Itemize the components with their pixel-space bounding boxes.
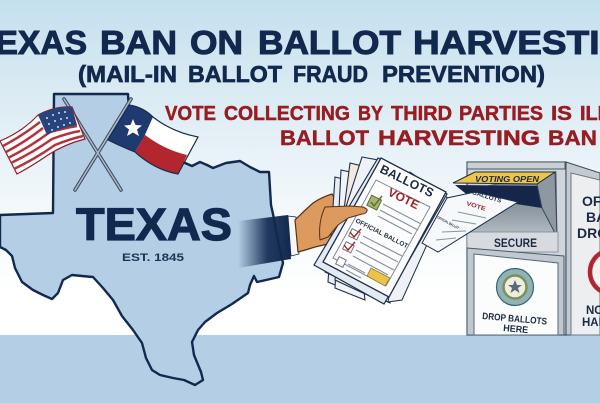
- yellow voting open label: [453, 172, 555, 184]
- red warning line 1: COLLECTING: [224, 103, 350, 125]
- red warning line 1: VOTE: [165, 103, 216, 125]
- red warning line 2: [280, 126, 597, 150]
- here text: HERE: [503, 323, 529, 336]
- Texas seal: [496, 268, 534, 306]
- secure label: SECURE: [494, 238, 537, 250]
- established date: EST. 1845: [122, 252, 184, 264]
- secure strip: [467, 232, 558, 252]
- vote label: VOTE: [386, 185, 421, 212]
- red warning line 1: [165, 103, 600, 125]
- front ballot: [323, 158, 446, 297]
- subtitle: (MAIL-IN: [78, 61, 177, 87]
- yellow stamp: [367, 268, 390, 286]
- box top band: [467, 162, 565, 169]
- lone star: [124, 119, 142, 136]
- flag poles: [64, 99, 131, 190]
- thumb over ballots: [320, 206, 367, 240]
- shirt cuff: [288, 216, 299, 256]
- crossed flags: [0, 99, 198, 190]
- no symbol: [590, 250, 600, 294]
- bottom band: [0, 335, 600, 403]
- ballot entering slot: [422, 190, 518, 252]
- red warning line 1: THIRD: [391, 103, 452, 125]
- Texas map: [0, 94, 283, 385]
- ballot lines: [346, 204, 421, 278]
- slot opening: [455, 185, 542, 208]
- subtitle: BALLOT: [188, 61, 282, 87]
- subtitle: FRAUD: [293, 61, 368, 87]
- ballot drop box: [453, 162, 600, 336]
- stars field: [46, 111, 71, 131]
- official ballot label: OFFICIAL BALLOT: [354, 218, 409, 250]
- box front: [467, 162, 566, 335]
- ballot heading: BALLOTS: [378, 162, 436, 200]
- flag: Texas: [108, 105, 198, 174]
- ballot entering slot: VOTE: [465, 201, 486, 213]
- red warning line 1: BY: [358, 103, 384, 125]
- side panel: [571, 173, 600, 335]
- red warning line 1: IS: [551, 103, 572, 125]
- Texas label: TEXAS: [76, 199, 232, 250]
- voting open text: VOTING OPEN: [475, 175, 539, 184]
- red warning line 2: BAN: [548, 126, 597, 150]
- lower panel frame: [467, 248, 564, 335]
- red warning line 2: BALLOT: [280, 126, 369, 150]
- checkboxes: [367, 195, 382, 210]
- hand with sleeve: [238, 194, 352, 268]
- white lower panel: [474, 254, 558, 335]
- subtitle: [78, 61, 545, 87]
- flag: United States: [0, 107, 85, 174]
- drop ballots text: DROP BALLOTS: [482, 311, 547, 328]
- sleeve: [238, 215, 291, 268]
- palm: [295, 194, 352, 252]
- title: BAN: [100, 24, 177, 61]
- subtitle: PREVENTION): [382, 61, 545, 87]
- red warning line 2: HARVESTING: [378, 126, 540, 150]
- red warning line 1: PARTIES: [459, 103, 543, 125]
- ballot fan: [314, 157, 448, 304]
- ballot entering slot: OFFICIAL BALLOT: [437, 215, 460, 230]
- title: ON: [190, 24, 243, 61]
- back sheets: [328, 177, 352, 292]
- title: [0, 24, 600, 61]
- ballot entering slot: BALLOTS: [471, 190, 502, 205]
- box side: [566, 162, 600, 335]
- title: BALLOT: [258, 24, 401, 61]
- side panel text: [577, 193, 600, 329]
- hood: [467, 172, 557, 237]
- flap side: [537, 172, 557, 237]
